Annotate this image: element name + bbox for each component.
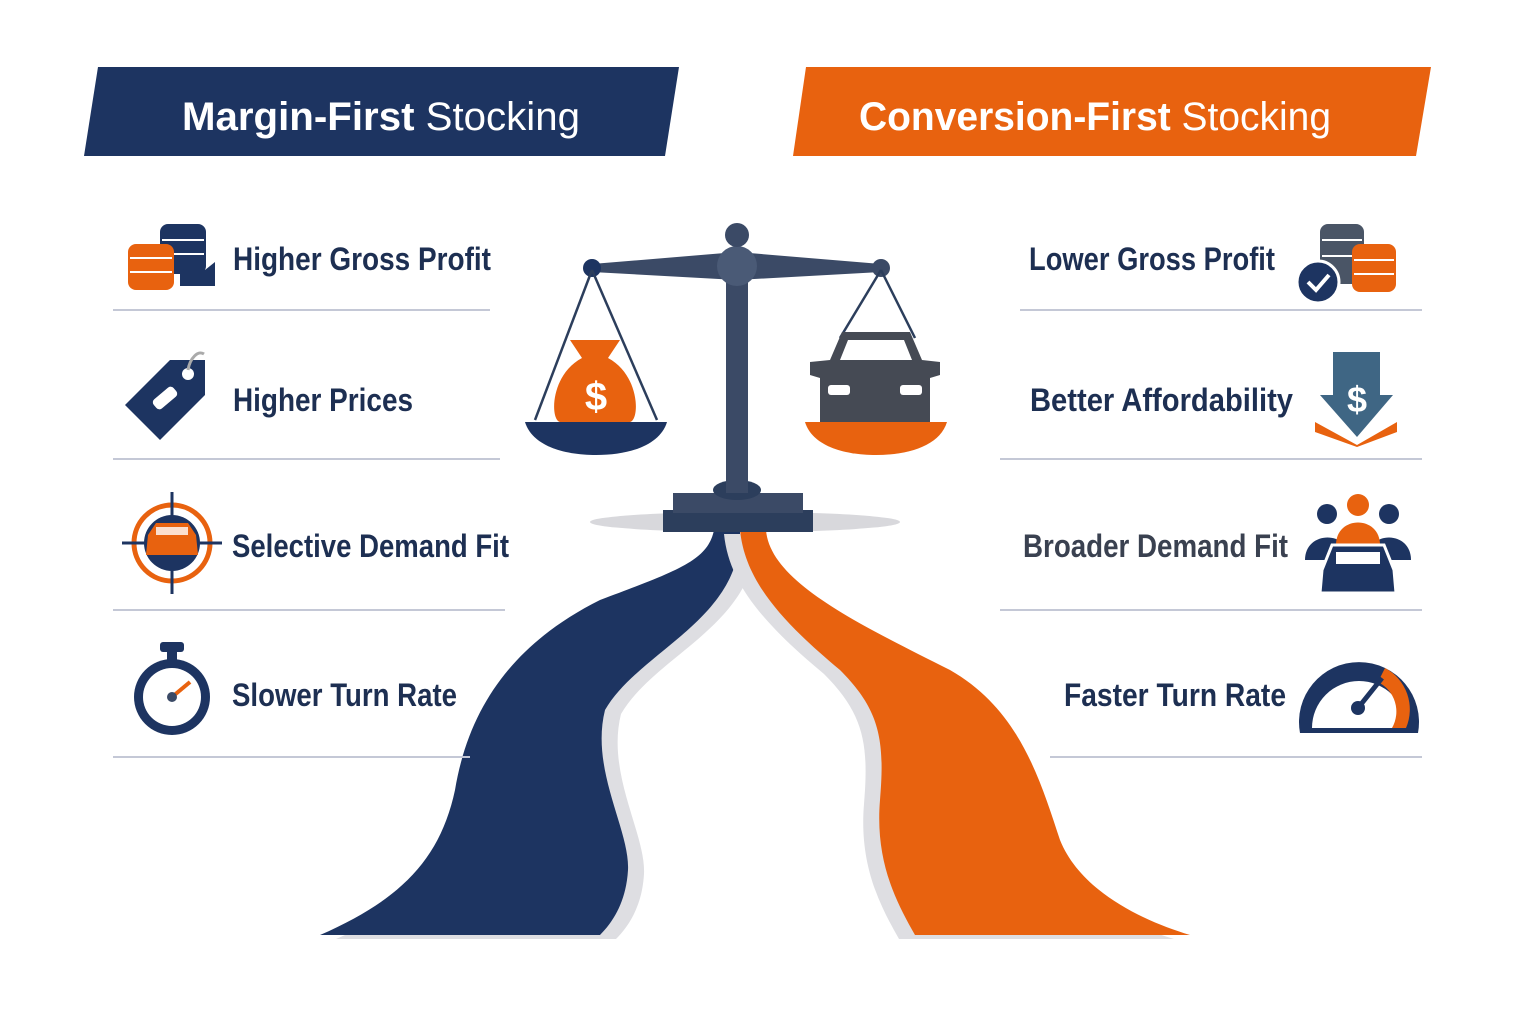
- right item: lower gross profit: Lower Gross Profit: [1029, 241, 1275, 277]
- right item: better affordability: Better Affordability: [1030, 382, 1293, 418]
- right item: better affordability: $: [1347, 379, 1367, 420]
- right item: faster turn rate: Faster Turn Rate: [1064, 677, 1286, 713]
- banner: margin-first: Margin-First Stocking: [182, 95, 580, 139]
- balance scale: [525, 223, 947, 532]
- left item: higher prices: Higher Prices: [233, 382, 413, 418]
- left item: higher prices: [125, 353, 413, 440]
- right item: lower gross profit: [1029, 224, 1396, 303]
- right pan with car: [805, 270, 947, 455]
- left item: selective demand fit: Selective Demand Fit: [232, 528, 509, 564]
- left item: higher gross profit: [128, 224, 491, 290]
- banner: margin-first: [84, 67, 679, 156]
- left item: slower turn rate: [134, 642, 457, 735]
- left item: higher gross profit: Higher Gross Profit: [233, 241, 491, 277]
- road: orange: [724, 530, 1190, 939]
- dividers: [113, 310, 1422, 757]
- left item: selective demand fit: [122, 492, 509, 594]
- left item: slower turn rate: Slower Turn Rate: [232, 677, 457, 713]
- right item: broader demand fit: [1023, 494, 1411, 593]
- left pan with money bag: $: [585, 375, 607, 419]
- left pan with money bag: [525, 270, 667, 455]
- banner: conversion-first: [793, 67, 1431, 156]
- right item: broader demand fit: Broader Demand Fit: [1023, 528, 1288, 564]
- road: navy: [320, 530, 756, 939]
- right item: faster turn rate: [1064, 662, 1419, 733]
- banner: conversion-first: Conversion-First Stocking: [859, 95, 1331, 139]
- right item: better affordability: [1030, 352, 1397, 447]
